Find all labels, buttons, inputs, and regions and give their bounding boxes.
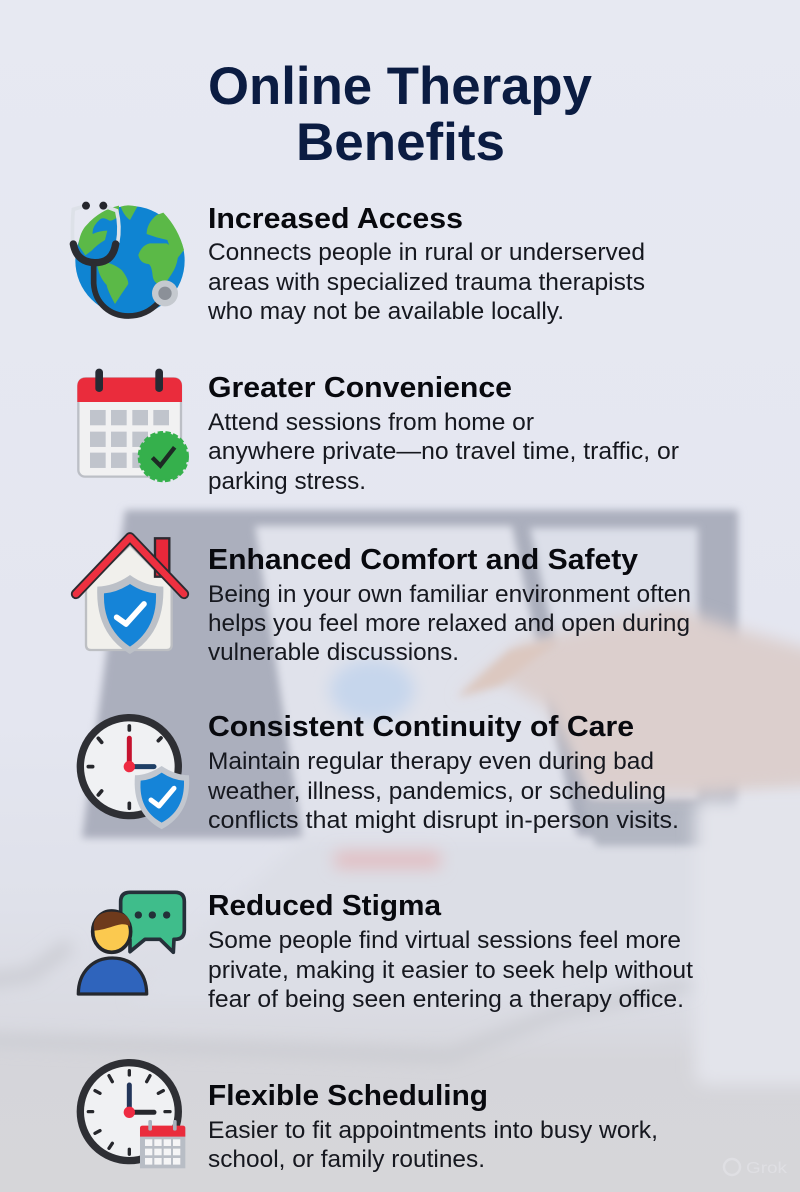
heading and text: Enhanced Comfort and Safety: Being in your own familiar environment often (208, 581, 691, 608)
heading and text: Increased Access: areas with specialized trauma therapists (208, 269, 645, 296)
heading and text: Flexible Scheduling (208, 1080, 658, 1173)
icon: clock with calendar (80, 1063, 185, 1168)
icon: house with shield (76, 537, 184, 654)
heading and text: Consistent Continuity of Care: conflicts that might disrupt in-person visits. (208, 807, 679, 834)
heading and text: Reduced Stigma (208, 890, 693, 1013)
icon: globe with stethoscope (72, 202, 185, 316)
heading and text: Flexible Scheduling: school, or family routines. (208, 1146, 485, 1173)
heading and text: Greater Convenience (208, 372, 679, 495)
heading and text: Reduced Stigma: private, making it easier to seek help without (208, 957, 693, 984)
title (208, 57, 593, 172)
heading and text: Greater Convenience: anywhere private—no travel time, traffic, or (208, 438, 679, 465)
heading and text: Enhanced Comfort and Safety: Enhanced Comfort and Safety (208, 544, 638, 576)
heading and text: Enhanced Comfort and Safety (208, 544, 691, 666)
icon: clock with shield (80, 718, 189, 829)
heading and text: Greater Convenience: parking stress. (208, 468, 366, 495)
heading and text: Flexible Scheduling: Flexible Scheduling (208, 1080, 488, 1112)
heading and text: Greater Convenience: Greater Convenience (208, 372, 512, 404)
heading and text: Increased Access (207, 203, 645, 325)
heading and text: Consistent Continuity of Care: weather, illness, pandemics, or scheduling (207, 778, 666, 805)
heading and text: Enhanced Comfort and Safety: vulnerable discussions. (208, 639, 459, 666)
heading and text: Consistent Continuity of Care: Consistent Continuity of Care (208, 711, 634, 743)
watermark: Grok (724, 1159, 788, 1177)
heading and text: Reduced Stigma: fear of being seen entering a therapy office. (208, 986, 684, 1013)
watermark: Grok: Grok (746, 1160, 788, 1177)
heading and text: Increased Access: who may not be available locally. (207, 298, 564, 325)
heading and text: Consistent Continuity of Care: Maintain regular therapy even during bad (208, 748, 654, 775)
icon: person with speech bubble (78, 892, 184, 994)
icon: calendar with check badge (77, 369, 187, 481)
heading and text: Consistent Continuity of Care (207, 711, 679, 834)
title: Online Therapy (208, 57, 593, 116)
heading and text: Flexible Scheduling: Easier to fit appointments into busy work, (208, 1117, 658, 1144)
title: Benefits (296, 113, 505, 172)
heading and text: Reduced Stigma: Reduced Stigma (208, 890, 442, 922)
heading and text: Enhanced Comfort and Safety: helps you feel more relaxed and open during (208, 610, 690, 637)
heading and text: Greater Convenience: Attend sessions from home or (208, 409, 534, 436)
heading and text: Increased Access: Increased Access (208, 203, 463, 235)
heading and text: Reduced Stigma: Some people find virtual sessions feel more (208, 927, 681, 954)
heading and text: Increased Access: Connects people in rural or underserved (208, 239, 645, 266)
